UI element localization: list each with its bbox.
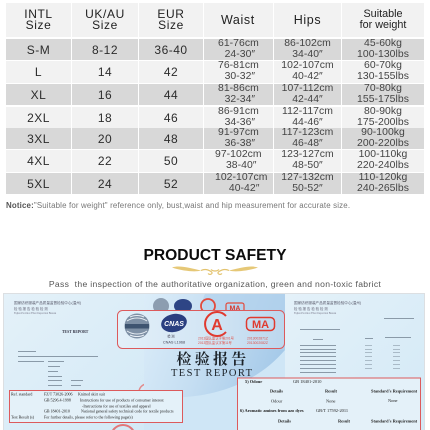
certificate: right sheet: Fujian Province Fiber Inspection Bureau — [294, 312, 337, 315]
callout: odour and aromatic amines results: Standard's Requirement — [371, 388, 418, 394]
callout: referenced standards: GB 5296.4-1998 — [44, 398, 71, 402]
row XL — [6, 83, 424, 105]
callout: odour and aromatic amines results: Odour — [271, 398, 283, 404]
row 3XL: 200-220lbs — [357, 138, 409, 148]
row 4XL: 38-40″ — [226, 160, 257, 171]
certificate: left sheet — [4, 294, 155, 430]
callout: odour and aromatic amines results: 6) Aromatic amines from azo dyes — [240, 408, 304, 413]
callout: referenced standards: National general safety technical code for textile products — [81, 408, 174, 414]
row 4XL — [6, 149, 424, 172]
row 4XL: 97-102cm — [215, 149, 262, 160]
icon: MA logo — [246, 318, 274, 345]
row S-M: S-M — [27, 42, 50, 56]
row 4XL: 220-240lbs — [357, 160, 409, 171]
row XL: 70-80kg — [364, 83, 402, 94]
row L — [6, 60, 424, 83]
table header row — [6, 3, 424, 37]
row 5XL: 52 — [164, 176, 178, 190]
row S-M: 34-40″ — [292, 48, 323, 60]
row L: 14 — [98, 65, 112, 79]
row 2XL: 2XL — [27, 110, 50, 124]
row 5XL: 24 — [98, 176, 112, 190]
row S-M — [6, 38, 424, 60]
icon: MA logo: MA — [252, 319, 269, 331]
row 5XL: 240-265lbs — [357, 182, 409, 194]
table header row: INTL — [24, 6, 53, 20]
table header row: Suitable — [363, 8, 403, 20]
row 2XL: 86-91cm — [218, 106, 259, 117]
row XL: 107-112cm — [282, 83, 333, 94]
icon: CMA A logo: A — [211, 317, 223, 334]
callout: odour and aromatic amines results: 5) Odour — [245, 379, 262, 384]
icon: CNAS logo: CNAS — [164, 321, 184, 328]
row 2XL: 175-200lbs — [357, 116, 409, 128]
row 3XL: 117-123cm — [282, 127, 333, 138]
row 5XL: 5XL — [27, 176, 50, 190]
callout: referenced standards: Test Result (s) — [11, 414, 35, 420]
row 2XL: 18 — [98, 110, 112, 124]
callout: odour and aromatic amines results — [238, 378, 420, 430]
callout: referenced standards: Ref. standard — [11, 392, 32, 396]
certificate: blue centre cover: MA — [230, 306, 240, 312]
callout: odour and aromatic amines results: Result — [325, 388, 337, 394]
table header row: Waist — [221, 13, 255, 27]
icon: CMA A logo: 2013国认监认字第201号 — [198, 336, 235, 340]
row XL: 81-86cm — [218, 83, 259, 94]
row 3XL: 36-38″ — [225, 138, 255, 148]
table header row: EUR — [157, 6, 185, 20]
row XL: 42-44″ — [292, 94, 323, 104]
row L: 60-70kg — [364, 60, 402, 71]
icon: CMA A logo: 2013国认监认字第11号 — [198, 340, 233, 345]
callout: odour and aromatic amines results: None — [326, 398, 336, 404]
row S-M: 24-30″ — [225, 48, 255, 60]
icon: round seal — [124, 314, 150, 338]
row 2XL — [6, 106, 424, 128]
row 3XL: 46-48″ — [292, 138, 323, 148]
icon: CNAS logo — [159, 311, 189, 344]
row 4XL: 48-50″ — [292, 160, 323, 171]
icon: CNAS logo: CNAS L1968 — [163, 340, 185, 344]
callout: odour and aromatic amines results: GB/T 17592-2011 — [316, 408, 348, 413]
notice text: Notice:"Suitable for weight" reference only, bust,waist and hip measurement for accurate size. — [6, 201, 350, 210]
row S-M: 100-130lbs — [357, 48, 409, 60]
row S-M: 86-102cm — [284, 38, 331, 49]
row 4XL: 22 — [98, 154, 112, 168]
callout: odour and aromatic amines results: Standard's Requirement — [371, 418, 418, 424]
icon: MA logo: 2013002871Z — [247, 336, 268, 340]
row 5XL: 102-107cm — [215, 172, 267, 183]
callout: referenced standards: GB 18401-2010 — [44, 408, 70, 414]
certificate: right sheet: 国家纺织服装产品质量监督检验中心(温州) — [294, 300, 361, 305]
certificate: blue centre cover — [144, 294, 285, 430]
row 2XL: 46 — [164, 110, 178, 124]
callout: referenced standards: Knitted skirt suit — [78, 392, 106, 396]
table header row: Size — [92, 18, 118, 32]
certificate: right sheet: 检 验 报 告 检 验 检 测 — [294, 306, 328, 311]
row 3XL — [6, 127, 424, 149]
row 3XL: 3XL — [27, 132, 50, 146]
callout: odour and aromatic amines results: GB 18401-2010 — [293, 379, 322, 384]
callout: referenced standards: Instructions for use of products of consumer interest — [80, 398, 165, 402]
row L: L — [35, 65, 42, 79]
row 2XL: 112-117cm — [282, 106, 333, 117]
certificate: blue centre cover: TEST REPORT — [171, 368, 253, 379]
callout: referenced standards — [10, 390, 182, 422]
row XL: 155-175lbs — [357, 94, 409, 104]
subtitle: Pass the inspection of the authoritative organization, green and non-toxic fabrict — [49, 279, 381, 289]
row 3XL: 91-97cm — [218, 127, 259, 138]
callout: referenced standards: For further details, please refer to the following page(s) — [44, 414, 133, 420]
callout: accreditation logos — [118, 310, 284, 348]
certificate: blue centre cover: 检验报告 — [176, 350, 250, 368]
size chart table — [6, 3, 424, 194]
row 4XL: 50 — [164, 154, 178, 168]
row 5XL: 40-42″ — [229, 182, 259, 194]
row L: 76-81cm — [218, 60, 259, 71]
row 4XL: 4XL — [27, 154, 50, 168]
callout: odour and aromatic amines results: Result — [338, 418, 350, 424]
heading: product safety: PRODUCT SAFETY — [144, 247, 286, 264]
certificate: left sheet: 国家纺织服装产品质量监督检验中心(温州) — [14, 300, 81, 305]
row 2XL: 44-46″ — [292, 116, 323, 128]
row S-M: 61-76cm — [218, 38, 259, 49]
row L: 42 — [164, 65, 178, 79]
row S-M: 45-60kg — [364, 38, 402, 49]
row 5XL: 110-120kg — [359, 172, 407, 183]
row XL: 32-34″ — [225, 94, 255, 104]
row 2XL: 34-36″ — [225, 116, 255, 128]
icon: CNAS logo: 检 测 — [167, 334, 175, 338]
callout: referenced standards: -Instructions for use of textiles and apparel — [82, 404, 152, 408]
row XL: 44 — [164, 88, 178, 102]
row S-M: 36-40 — [154, 42, 188, 56]
table header row: UK/AU — [85, 6, 125, 20]
row 3XL: 48 — [164, 132, 178, 146]
icon: gold ornament divider — [172, 266, 258, 275]
row XL: 16 — [98, 88, 112, 102]
row L: 102-107cm — [281, 60, 334, 71]
certificate: right sheet — [285, 294, 424, 430]
table header row: Size — [26, 18, 51, 32]
row L: 130-155lbs — [357, 71, 409, 82]
callout: odour and aromatic amines results: Details — [278, 418, 291, 424]
row 5XL: 127-132cm — [281, 172, 334, 183]
certificate: left sheet: Fujian Province Fiber Inspection Bureau — [14, 312, 57, 315]
row 4XL: 100-110kg — [359, 149, 407, 160]
row 3XL: 90-100kg — [361, 127, 405, 138]
icon: CMA A logo — [198, 312, 235, 345]
callout: odour and aromatic amines results: Details — [270, 388, 283, 394]
table header row: for weight — [360, 19, 406, 31]
certificate: left sheet: 检 验 报 告 检 验 检 测 — [14, 306, 48, 311]
table header row: Hips — [294, 13, 321, 27]
callout: referenced standards: FZ/T 73026-2006 — [44, 392, 72, 396]
certificates panel — [3, 293, 425, 430]
certificate: left sheet: TEST REPORT — [62, 330, 89, 334]
row 5XL: 50-52″ — [292, 182, 323, 194]
table header row: Size — [158, 18, 184, 32]
row L: 30-32″ — [225, 71, 255, 82]
row XL: XL — [31, 88, 46, 102]
icon: MA logo: 2013002082Z — [247, 341, 268, 345]
row 2XL: 80-90kg — [364, 106, 402, 117]
row S-M: 8-12 — [92, 42, 118, 56]
row 3XL: 20 — [98, 132, 112, 146]
row 5XL — [6, 172, 424, 194]
row 4XL: 123-127cm — [281, 149, 334, 160]
row L: 40-42″ — [292, 71, 323, 82]
callout: odour and aromatic amines results: None — [388, 398, 398, 403]
